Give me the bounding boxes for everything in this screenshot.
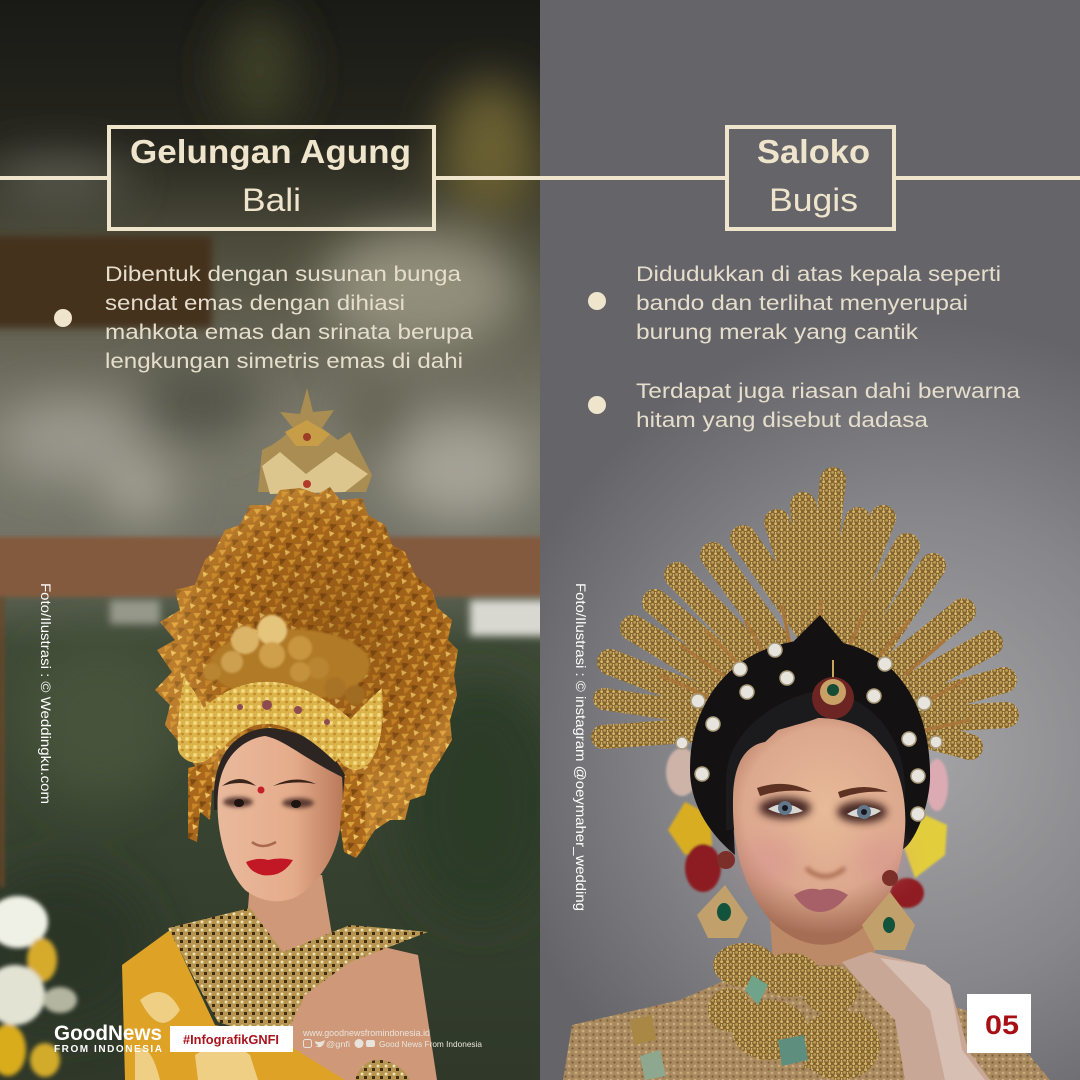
text block: Bugis description one: burung merak yang cantik — [636, 320, 918, 344]
text block: Bali description: mahkota emas dan srinata berupa — [105, 320, 473, 344]
neck and shoulders — [245, 875, 437, 1080]
footer: social links: www.goodnewsfromindonesia.id — [302, 1028, 430, 1038]
heading: Gelungan Agung Bali — [109, 127, 434, 229]
illustration: Balinese bride — [122, 388, 458, 1080]
hair — [214, 728, 345, 810]
heading: Saloko Bugis — [727, 127, 894, 229]
panel: left background photo — [0, 0, 560, 1080]
photo credit: right: Foto/Ilustrasi : © instagram @oeymaher_wedding — [573, 583, 589, 911]
wood beam: upper — [0, 236, 212, 328]
gold flower cluster — [203, 615, 370, 705]
gold necklaces — [708, 943, 880, 1080]
right crown ear ornament — [336, 688, 383, 770]
illustration: Bugis bride — [563, 480, 1050, 1080]
header rule: horizontal lines — [0, 176, 1080, 180]
bronze rods — [660, 600, 970, 730]
footer: logo: GoodNews — [54, 1022, 162, 1045]
footer: social links: @gnfi — [326, 1039, 350, 1049]
pearls — [676, 643, 942, 821]
left earring — [697, 851, 748, 938]
gold arm band — [355, 1060, 410, 1080]
footer: logo: FROM INDONESIA — [54, 1044, 162, 1055]
footer: social links: Good News From Indonesia — [379, 1039, 482, 1049]
bokeh highlight — [470, 600, 550, 636]
golden flower headdress — [155, 487, 458, 845]
forehead jewel — [812, 660, 854, 719]
face — [733, 718, 905, 945]
gold crown band — [205, 700, 350, 747]
heading: Gelungan Agung Bali: Bali — [242, 182, 301, 218]
footer: hashtag — [170, 1026, 293, 1052]
text block: Bugis description two — [588, 379, 1020, 432]
wood beam: lower — [0, 537, 550, 597]
heading: Saloko Bugis: Saloko — [757, 133, 870, 170]
headdress top ornament — [258, 388, 372, 494]
heading: Saloko Bugis: Bugis — [769, 182, 858, 218]
text block: Bali description: Dibentuk dengan susunan bunga — [105, 262, 461, 286]
gem brooches — [630, 975, 808, 1080]
text block: Bugis description two: hitam yang disebut dadasa — [636, 408, 928, 432]
right flowers — [890, 759, 948, 908]
text block: Bugis description two: Terdapat juga riasan dahi berwarna — [636, 379, 1020, 403]
footer: social links — [302, 1028, 482, 1049]
panel: right background — [540, 0, 1080, 1080]
lace hand — [842, 952, 990, 1080]
text block: Bugis description one — [588, 262, 1001, 344]
right gold tassels — [340, 774, 366, 858]
text block: Bugis description one: bando dan terlihat menyerupai — [636, 291, 968, 315]
yellow dress — [122, 930, 345, 1080]
photo credit: left: Foto/Ilustrasi : © Weddingku.com — [38, 583, 54, 804]
footer: logo — [54, 1022, 162, 1055]
text block: Bugis description one: Didudukkan di atas kepala seperti — [636, 262, 1001, 286]
left flowers — [666, 748, 721, 892]
black hood — [690, 640, 930, 855]
saloko fan headdress — [603, 480, 1006, 747]
text block: Bali description: sendat emas dengan dihiasi — [105, 291, 405, 315]
right earring — [862, 870, 915, 950]
page number — [967, 994, 1031, 1053]
text block: Bali description: lengkungan simetris emas di dahi — [105, 349, 463, 373]
neck — [770, 920, 876, 965]
brocade dress — [563, 965, 1050, 1080]
gold collar — [168, 908, 428, 1042]
page number: 05 — [985, 1010, 1019, 1040]
left crown ear ornament — [178, 676, 216, 763]
illustration: white and yellow flowers — [0, 896, 77, 1077]
heading: Gelungan Agung Bali: Gelungan Agung — [130, 133, 411, 170]
text block: Bali description — [54, 262, 473, 373]
left gold tassels — [188, 762, 214, 842]
face — [218, 736, 343, 901]
footer: hashtag: #InfografikGNFI — [183, 1033, 279, 1047]
